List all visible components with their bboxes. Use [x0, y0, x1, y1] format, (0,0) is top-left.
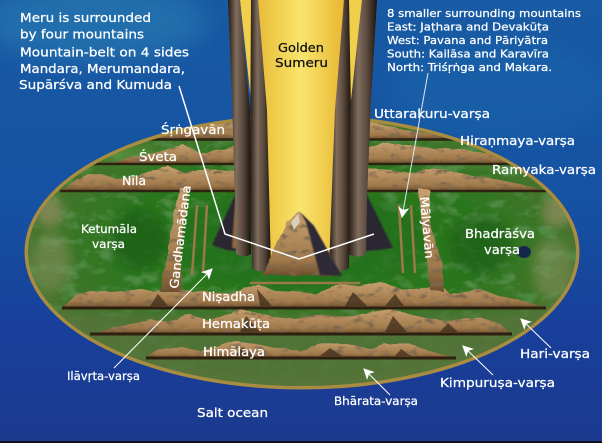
- varṣa labels: varṣa: [92, 237, 125, 251]
- north mountain ranges: [60, 120, 546, 191]
- varṣa labels: Hiraṇmaya-varṣa: [460, 134, 575, 148]
- terrain patches: [32, 147, 572, 392]
- varṣa labels: Uttarakuru-varṣa: [374, 107, 490, 121]
- island disc with golden rim: [27, 117, 577, 392]
- central mountain: [262, 212, 342, 276]
- arrow: eight smaller mountains: [402, 73, 428, 217]
- text: eight smaller mountains note: East: Jaṭhara and Devakūṭa: [387, 20, 549, 34]
- varṣa labels: Kimpuruṣa-varṣa: [440, 376, 555, 390]
- varṣa labels: varṣa: [484, 243, 520, 257]
- varṣa labels: Ilāvṛta-varṣa: [67, 369, 140, 383]
- tower pillars: [228, 0, 377, 272]
- text: four mountains note: [19, 11, 189, 92]
- mountain labels: Niṣadha: [202, 290, 255, 304]
- mountain labels: [122, 122, 436, 359]
- varṣa labels: Hari-varṣa: [520, 347, 590, 361]
- text: four mountains note: by four mountains: [20, 28, 144, 42]
- varṣa labels: Ramyaka-varṣa: [492, 163, 596, 177]
- mountain labels: Nīla: [122, 174, 146, 188]
- label: Salt ocean: Salt ocean: [197, 406, 268, 420]
- varṣa labels: [67, 107, 596, 408]
- mountain labels: Himālaya: [203, 345, 265, 359]
- mountain labels: Gandhamādana: [167, 184, 194, 289]
- text: four mountains note: Mandara, Merumandara,: [20, 62, 185, 76]
- title: Golden Sumeru: Sumeru: [275, 56, 328, 70]
- text: eight smaller mountains note: West: Pavana and Pāriyātra: [387, 34, 548, 47]
- text: four mountains note: Meru is surrounded: [20, 11, 151, 25]
- mountain labels: Śṛṅgavān: [161, 122, 225, 137]
- text: four mountains note: Mountain-belt on 4 sides: [20, 46, 189, 60]
- text: eight smaller mountains note: North: Triśṛṅga and Makara.: [387, 61, 552, 74]
- text: eight smaller mountains note: [387, 7, 581, 74]
- title: Golden Sumeru: Golden: [278, 41, 324, 55]
- arrows to varṣas: [114, 269, 551, 395]
- varṣa labels: Bhadrāśva: [465, 227, 535, 241]
- text: four mountains note: Supārśva and Kumuda: [19, 78, 172, 92]
- varṣa labels: Bhārata-varṣa: [334, 394, 418, 408]
- Gandhamādana and Mālyavān ridges: [160, 188, 444, 292]
- mountain labels: Śveta: [139, 149, 177, 164]
- text: eight smaller mountains note: South: Kailāsa and Karavīra: [387, 48, 549, 60]
- mountain labels: Mālyavān: [417, 196, 436, 259]
- varṣa labels: Ketumāla: [81, 222, 137, 236]
- south mountain ranges: [62, 282, 546, 358]
- golden Sumeru tower: [228, 0, 377, 272]
- pointer line: four mountains: [179, 86, 374, 259]
- mountain labels: Hemakūṭa: [202, 317, 270, 331]
- title: Golden Sumeru: [275, 41, 328, 70]
- side mountains (behind tower): [212, 195, 393, 252]
- text: eight smaller mountains note: 8 smaller surrounding mountains: [387, 7, 581, 20]
- fences around Ilāvṛta: [192, 205, 415, 283]
